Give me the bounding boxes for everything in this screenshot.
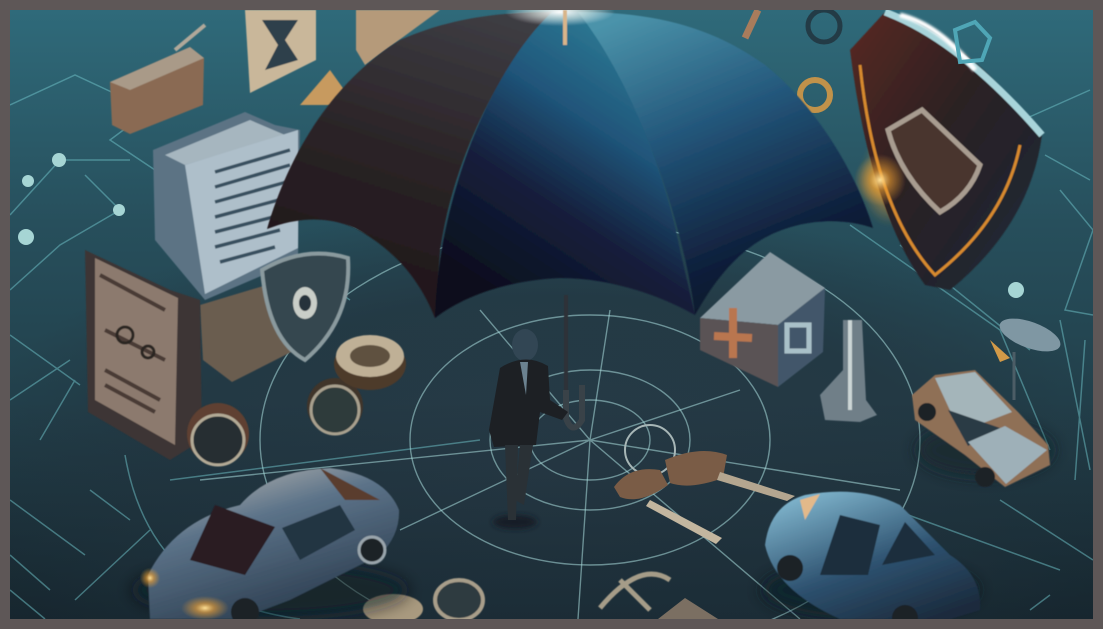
icon: grey sedan bottom left (130, 468, 410, 626)
icon: medical cross box (700, 252, 825, 387)
icon: document cards top (245, 10, 440, 105)
icon: blue car bottom right (760, 492, 980, 629)
icon: coins (187, 335, 670, 624)
icon: stack of documents (153, 112, 300, 300)
icon: keys (614, 425, 795, 544)
figure: businessman holding umbrella (489, 329, 582, 529)
icon: padlock top left (110, 25, 205, 134)
icon: folder and shield badge (200, 254, 348, 382)
icon: small house roof bottom (658, 598, 718, 619)
icon: small tower figurine (820, 320, 877, 422)
icon: open booklet (85, 250, 202, 460)
umbrella canopy (267, 0, 873, 400)
icon: orange car right (912, 370, 1055, 487)
icon: satellite dish (990, 318, 1060, 400)
icon: shield (850, 12, 1042, 290)
target circles on floor (18, 153, 1024, 629)
icon: hexagon and chain ornaments (745, 10, 990, 110)
